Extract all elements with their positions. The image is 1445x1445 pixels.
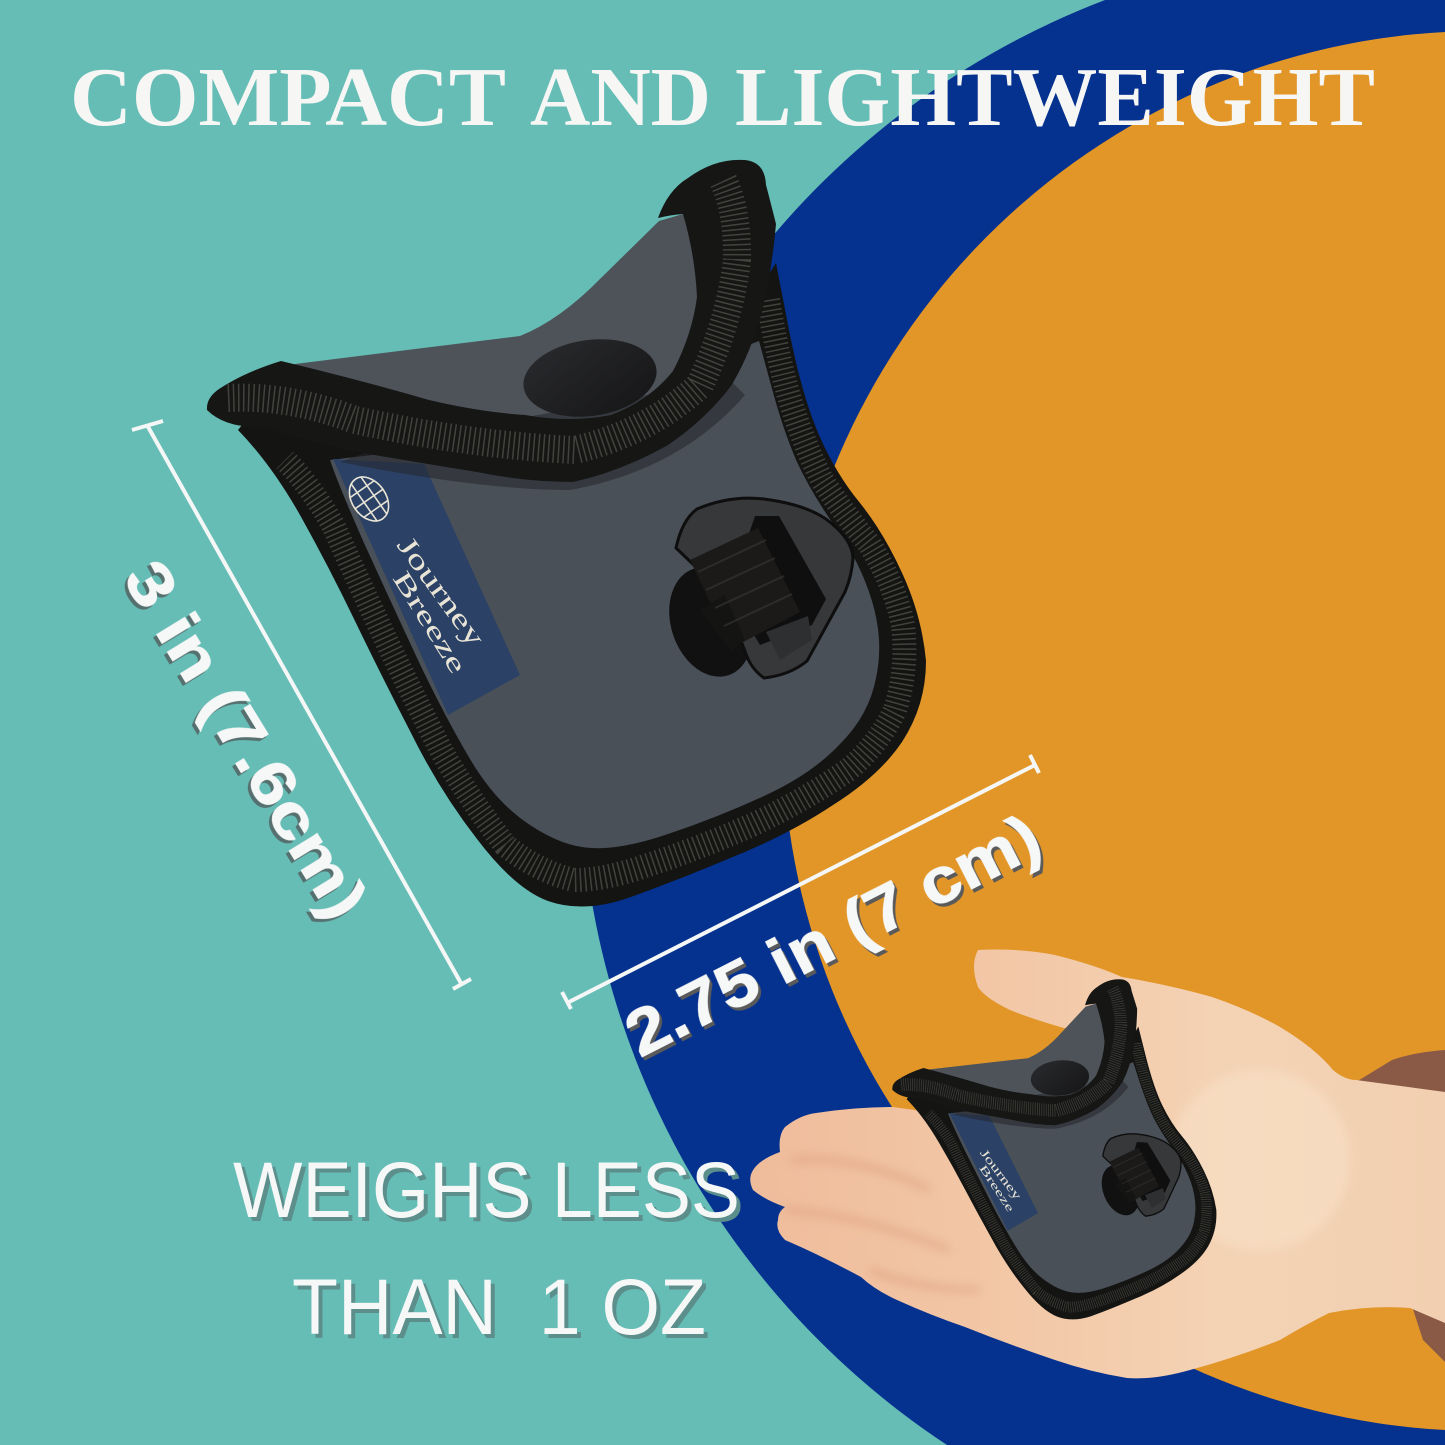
- small brand label text: [975, 1146, 1026, 1215]
- title: LIGHTWEIGHT: [735, 51, 1375, 144]
- small pouch: [885, 975, 1224, 1322]
- dimension line: height: [132, 421, 471, 989]
- title: COMPACT: [70, 51, 506, 144]
- hand holding small pouch: [750, 950, 1445, 1378]
- weight text: [233, 1145, 740, 1351]
- title: AND: [530, 51, 711, 144]
- title: [70, 51, 1375, 144]
- highlight palm: [1170, 1070, 1350, 1250]
- dimension label: height: 3 in (7.6cm): [110, 549, 381, 931]
- small brand label text: Breeze: [976, 1163, 1017, 1214]
- finger shading: [785, 1159, 980, 1290]
- background: orange circle: [782, 32, 1445, 1430]
- brand label text: Journey: [390, 531, 491, 653]
- small brand label text: Journey: [977, 1146, 1025, 1203]
- sleeve: [1356, 1050, 1445, 1362]
- background: blue circle: [580, 0, 1445, 1445]
- large pouch photo: [207, 160, 926, 907]
- brand label text: [341, 470, 491, 679]
- brand label text: Breeze: [387, 566, 472, 679]
- weight text: THAN 1 OZ: [292, 1262, 706, 1351]
- dimension label: width: 2.75 in (7 cm): [614, 800, 1052, 1070]
- weight text: WEIGHS LESS: [233, 1145, 740, 1234]
- dimension line: width: [562, 755, 1039, 1009]
- palm and fingers: [750, 950, 1445, 1378]
- icon: brand globe: [341, 470, 397, 528]
